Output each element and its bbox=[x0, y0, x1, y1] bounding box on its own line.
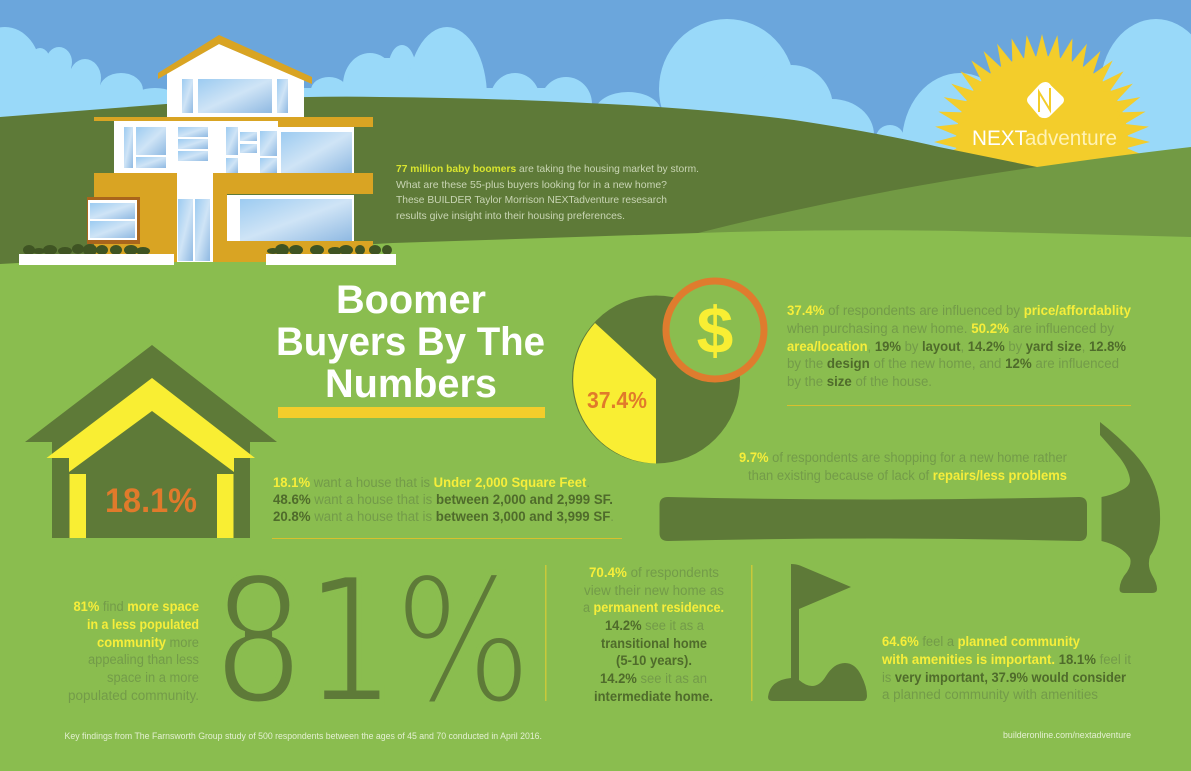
title bbox=[276, 278, 545, 406]
intro text: 77 million baby boomers are taking the housing market by storm. bbox=[396, 163, 699, 175]
text: purchase influences: when purchasing a new home. 50.2% are influenced by bbox=[786, 321, 1114, 336]
text: residence type: transitional home bbox=[601, 636, 707, 651]
icon: hammer bbox=[660, 422, 1160, 593]
sun bbox=[934, 34, 1150, 250]
illustration: house bbox=[19, 35, 396, 265]
text: residence type: (5-10 years). bbox=[616, 653, 692, 668]
icon: dollar circle bbox=[666, 281, 764, 379]
title: Boomer bbox=[336, 278, 486, 322]
dark hill bbox=[0, 97, 1037, 270]
sky background bbox=[0, 0, 1191, 300]
text: repairs: than existing because of lack of repairs/less problems bbox=[748, 468, 1067, 483]
footer source note: Key findings from The Farnsworth Group study of 500 respondents between the ages of 45 and 70 conducted in April 2016. bbox=[64, 731, 542, 741]
text: 81 percent explanation: in a less populated bbox=[87, 617, 199, 632]
green ground bbox=[0, 230, 1191, 771]
icon: golf flag bbox=[768, 564, 867, 701]
text: purchase influences: area/location, 19% by layout, 14.2% by yard size, 12.8% bbox=[787, 339, 1126, 354]
text: residence type: 14.2% see it as an bbox=[600, 671, 707, 686]
icon: house with 18.1%: 18.1% bbox=[105, 482, 197, 520]
title: Numbers bbox=[325, 362, 497, 406]
text: residence type: 70.4% of respondents bbox=[589, 565, 719, 580]
icon: house with 18.1% bbox=[25, 345, 277, 538]
text: planned community: is very important, 37.9% would consider bbox=[882, 670, 1127, 685]
text: residence type: a permanent residence. bbox=[583, 600, 724, 615]
intro text: results give insight into their housing preferences. bbox=[396, 210, 625, 222]
text: 81 percent explanation: 81% find more space bbox=[74, 599, 199, 614]
text: planned community: a planned community with amenities bbox=[882, 687, 1098, 702]
clouds bbox=[0, 19, 1191, 213]
text: planned community: with amenities is important. 18.1% feel it bbox=[881, 652, 1131, 667]
icon: dollar circle: $ bbox=[697, 293, 733, 367]
intro text bbox=[396, 163, 699, 222]
text: house size: 48.6% want a house that is between 2,000 and 2,999 SF. bbox=[273, 492, 613, 507]
text: repairs: 9.7% of respondents are shopping for a new home rather bbox=[739, 450, 1067, 465]
chart: pie 37.4%: 37.4% bbox=[587, 387, 647, 413]
big number 81%: 81% bbox=[213, 541, 531, 744]
medium hill bbox=[698, 147, 1191, 245]
text: purchase influences: by the design of the new home, and 12% are influenced bbox=[787, 356, 1119, 371]
text: house size bbox=[272, 475, 622, 539]
text: house size: 18.1% want a house that is Under 2,000 Square Feet. bbox=[273, 475, 590, 490]
text: purchase influences bbox=[786, 303, 1131, 406]
footer url: builderonline.com/nextadventure bbox=[1003, 730, 1131, 740]
text: planned community bbox=[881, 634, 1131, 702]
text: 81 percent explanation: space in a more bbox=[107, 670, 199, 685]
logo wordmark: NEXTadventure bbox=[972, 127, 1117, 150]
intro text: What are these 55-plus buyers looking for in a new home? bbox=[396, 179, 667, 191]
title underline bbox=[278, 407, 545, 418]
intro text: These BUILDER Taylor Morrison NEXTadventure resesarch bbox=[396, 194, 667, 206]
text: house size: 20.8% want a house that is between 3,000 and 3,999 SF. bbox=[273, 509, 614, 524]
text: 81 percent explanation bbox=[68, 599, 199, 703]
text: residence type: 14.2% see it as a bbox=[605, 618, 704, 633]
text: purchase influences: by the size of the house. bbox=[787, 374, 932, 389]
chart: pie 37.4% bbox=[572, 296, 740, 464]
text: repairs bbox=[739, 450, 1067, 483]
text: 81 percent explanation: populated community. bbox=[68, 688, 199, 703]
logo: NEXT diamond mark bbox=[1027, 82, 1064, 118]
text: 81 percent explanation: community more bbox=[97, 635, 199, 650]
text: 81 percent explanation: appealing than less bbox=[88, 652, 199, 667]
text: purchase influences: 37.4% of respondents are influenced by price/affordablity bbox=[787, 303, 1131, 318]
title: Buyers By The bbox=[276, 320, 545, 364]
text: planned community: 64.6% feel a planned community bbox=[882, 634, 1080, 649]
text: residence type bbox=[545, 565, 752, 704]
text: residence type: view their new home as bbox=[584, 583, 724, 598]
text: residence type: intermediate home. bbox=[594, 689, 713, 704]
